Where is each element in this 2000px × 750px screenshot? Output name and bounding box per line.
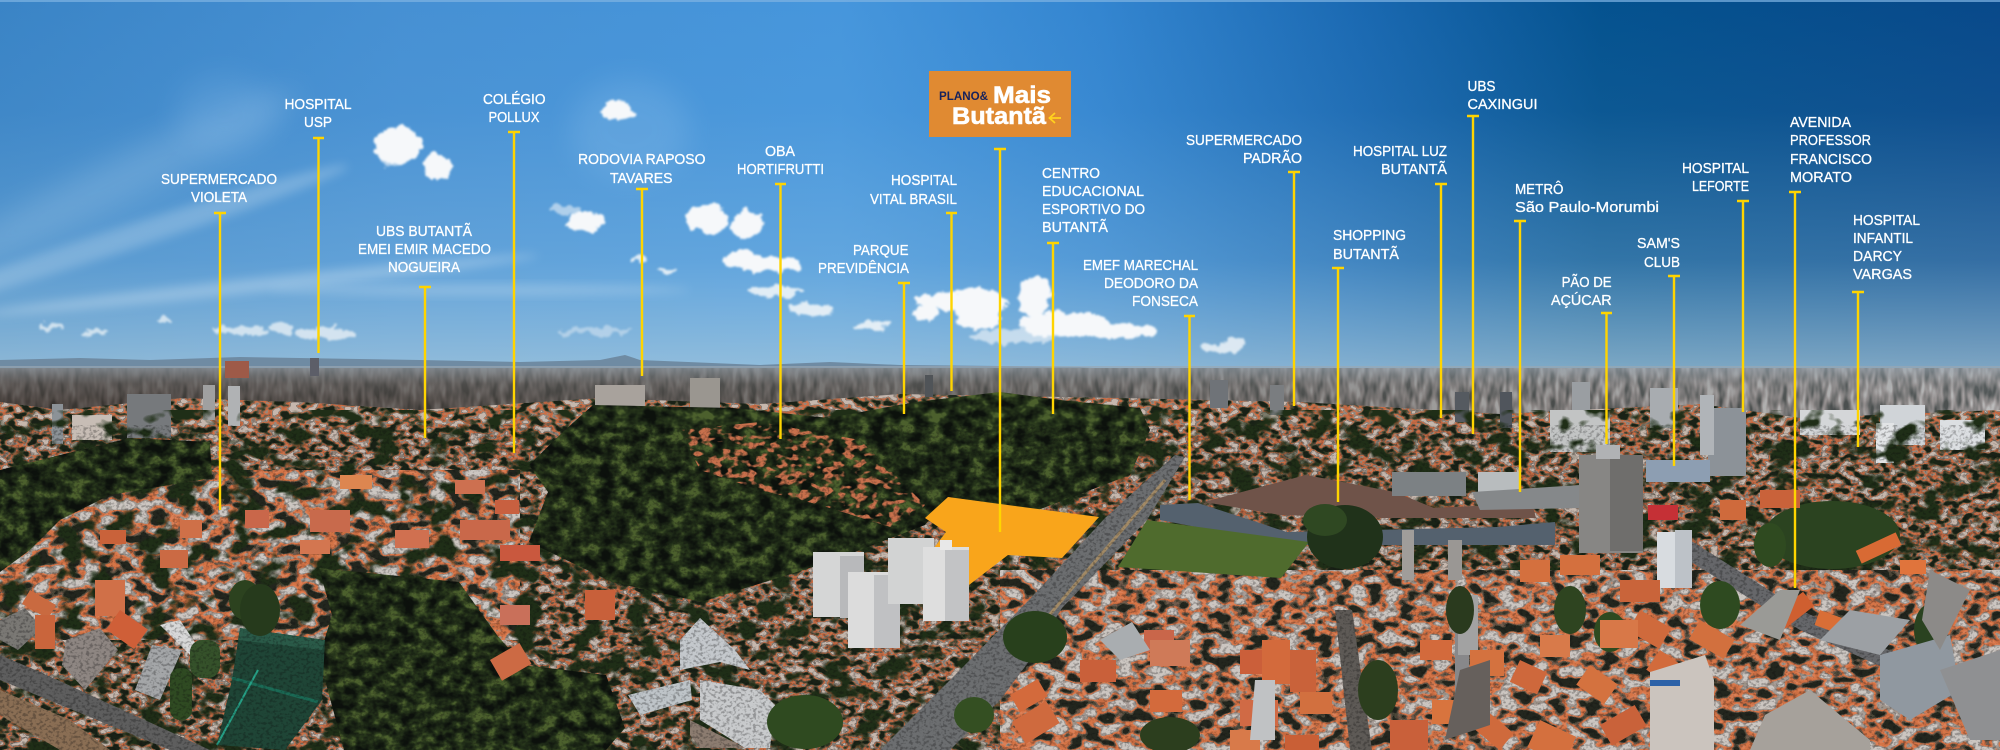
label: Shopping Butantã: SHOPPING <box>1333 227 1406 244</box>
orange house roofs <box>22 475 1926 750</box>
new car parking lots <box>628 618 775 748</box>
forest areas <box>0 392 1150 750</box>
distant city skyline and mountains <box>0 355 2000 463</box>
logo: Plano& Mais Butantã: Butantã <box>952 103 1047 130</box>
label: Supermercado Violeta: SUPERMERCADO <box>161 171 277 188</box>
label: Hospital Leforte <box>1682 160 1749 195</box>
label: Hospital Vital Brasil: VITAL BRASIL <box>870 191 957 208</box>
label: Avenida Professor Francisco Morato: AVENIDA <box>1790 114 1851 131</box>
label: Oba Hortifrutti: OBA <box>765 143 795 160</box>
panoramic sky background <box>0 0 2000 372</box>
label: Parque Previdência: PARQUE <box>853 242 908 259</box>
label: UBS Butantã: NOGUEIRA <box>388 259 460 276</box>
logo: Plano& Mais Butantã: PLANO& <box>939 89 988 103</box>
label: Supermercado Padrão: PADRÃO <box>1243 150 1302 167</box>
tennis courts <box>217 628 325 750</box>
foreground roof density <box>0 470 2000 750</box>
label: Hospital Infantil Darcy Vargas: VARGAS <box>1853 266 1912 283</box>
ground: neighbourhood base <box>0 362 2000 750</box>
label: UBS Caxingui: UBS <box>1468 78 1496 95</box>
label: Colégio Pollux: POLLUX <box>488 109 540 126</box>
label: Hospital USP: HOSPITAL <box>284 96 352 113</box>
label: Hospital Infantil Darcy Vargas: HOSPITAL <box>1853 212 1920 229</box>
green empty lot <box>1118 520 1309 578</box>
label: Supermercado Padrão <box>1186 132 1302 167</box>
lower-left shops <box>0 608 220 720</box>
label: Colégio Pollux <box>483 91 546 126</box>
label: Centro Educacional <box>1042 165 1145 236</box>
label: Rodovia Raposo Tavares: TAVARES <box>610 170 672 187</box>
label: Sam's Club <box>1637 235 1680 271</box>
label: Hospital Luz Butantã <box>1353 143 1447 178</box>
logo: Plano& Mais Butantã: Mais <box>993 82 1051 109</box>
label: UBS Butantã <box>358 223 491 276</box>
grey and white highrise towers <box>1402 395 1746 720</box>
location markers: vertical yellow pointer lines <box>214 116 1864 588</box>
label: Pão de Açúcar: AÇÚCAR <box>1551 292 1612 309</box>
icon: yellow arrow <box>1050 113 1061 123</box>
label: Hospital USP: USP <box>304 114 332 131</box>
label: UBS Caxingui <box>1468 78 1538 113</box>
label: Avenida Professor Francisco Morato: MORATO <box>1790 169 1852 186</box>
label: Oba Hortifrutti: HORTIFRUTTI <box>737 161 824 178</box>
label: Hospital Infantil Darcy Vargas: INFANTIL <box>1853 230 1913 247</box>
label: Metrô São Paulo-Morumbi <box>1515 181 1659 216</box>
label: Shopping Butantã: BUTANTÃ <box>1333 246 1399 263</box>
label: Hospital Leforte: HOSPITAL <box>1682 160 1749 177</box>
label: Centro Educacional: ESPORTIVO DO <box>1042 201 1145 218</box>
label: Hospital Vital Brasil <box>870 172 957 208</box>
label: UBS Butantã: EMEI EMIR MACEDO <box>358 241 491 258</box>
label: EMEF Marechal: FONSECA <box>1132 293 1198 310</box>
label: Avenida Professor Francisco Morato: FRANCISCO <box>1790 151 1872 168</box>
label: Avenida Professor Francisco Morato: PROFESSOR <box>1790 132 1871 149</box>
label: Centro Educacional: EDUCACIONAL <box>1042 183 1144 200</box>
label: Pão de Açúcar: PÃO DE <box>1562 274 1612 291</box>
label: Hospital Infantil Darcy Vargas: DARCY <box>1853 248 1902 265</box>
label: EMEF Marechal: DEODORO DA <box>1104 275 1198 292</box>
clouds <box>39 101 1243 353</box>
label: Parque Previdência: PREVIDÊNCIA <box>818 260 909 277</box>
label: Oba Hortifrutti <box>737 143 824 178</box>
white residential towers <box>813 538 934 648</box>
scattered tree canopy over neighbourhoods <box>0 410 2000 750</box>
label: Supermercado Violeta <box>161 171 277 206</box>
neighbourhood patch within forest <box>680 422 925 530</box>
label: Supermercado Padrão: SUPERMERCADO <box>1186 132 1302 149</box>
label: Hospital USP <box>284 96 352 131</box>
label: Hospital Luz Butantã: HOSPITAL LUZ <box>1353 143 1447 160</box>
label: EMEF Marechal: EMEF MARECHAL <box>1083 257 1198 274</box>
label: Supermercado Violeta: VIOLETA <box>191 189 247 206</box>
label: Metrô São Paulo-Morumbi: São Paulo-Morumbi <box>1515 199 1659 216</box>
label: Hospital Luz Butantã: BUTANTÃ <box>1381 161 1447 178</box>
label: EMEF Marechal <box>1083 257 1198 310</box>
label: UBS Butantã: UBS BUTANTÃ <box>376 223 472 240</box>
orange project site <box>925 497 1099 585</box>
label: Avenida Professor Francisco Morato <box>1790 114 1872 186</box>
label: Centro Educacional: BUTANTÃ <box>1042 219 1108 236</box>
label: Sam's Club: SAM'S <box>1637 235 1680 252</box>
labels: places <box>161 78 1920 310</box>
label: UBS Caxingui: CAXINGUI <box>1468 96 1538 113</box>
warehouse and shopping roof <box>1160 472 1580 545</box>
label: Parque Previdência <box>818 242 909 277</box>
label: Rodovia Raposo Tavares: RODOVIA RAPOSO <box>578 151 706 168</box>
light and grey foreground buildings <box>1100 570 2000 750</box>
label: Rodovia Raposo Tavares <box>578 151 706 187</box>
foreground tree clusters <box>229 501 1946 750</box>
label: Sam's Club: CLUB <box>1644 254 1680 271</box>
label: Hospital Leforte: LEFORTE <box>1692 178 1749 195</box>
label: Shopping Butantã <box>1333 227 1406 263</box>
front residential tower <box>923 540 969 621</box>
label: Hospital Infantil Darcy Vargas <box>1853 212 1920 283</box>
label: Centro Educacional: CENTRO <box>1042 165 1100 182</box>
label: Pão de Açúcar <box>1551 274 1612 309</box>
roads and highway <box>0 455 2000 750</box>
label: Hospital Vital Brasil: HOSPITAL <box>891 172 957 189</box>
fine aerial-photo grain over ground <box>0 425 2000 750</box>
label: Metrô São Paulo-Morumbi: METRÔ <box>1515 181 1564 198</box>
label: Colégio Pollux: COLÉGIO <box>483 91 546 108</box>
logo: Plano& Mais Butantã <box>929 71 1071 137</box>
